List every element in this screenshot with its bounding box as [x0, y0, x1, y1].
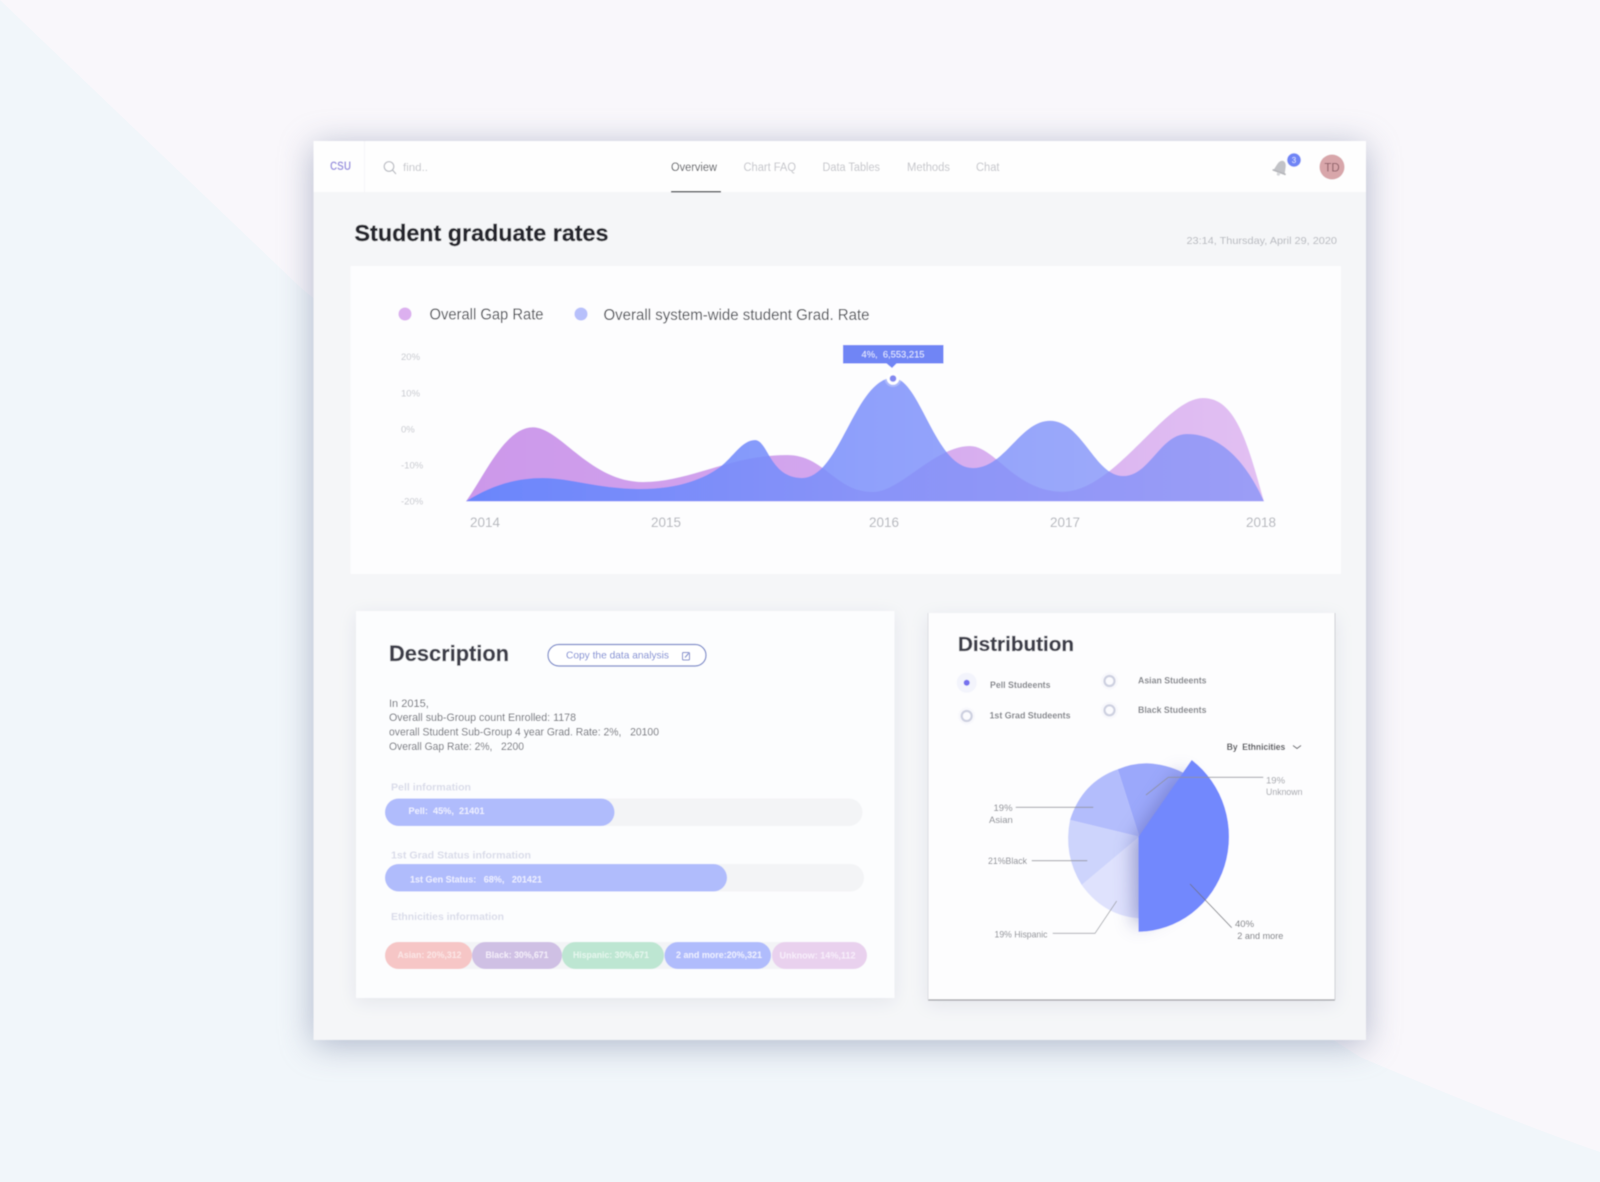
bar: Pell	[385, 798, 862, 826]
tab: Overview: Overview	[671, 162, 718, 174]
segment: Hispanic: Hispanic: 30%,671	[573, 950, 649, 960]
icon: search	[384, 162, 396, 174]
panel: distribution	[928, 613, 1335, 1000]
x axis labels: 2017	[1050, 514, 1080, 530]
dashboard window shadow	[313, 146, 1366, 1045]
slice: 2 and more	[1138, 760, 1229, 932]
y axis labels: 0%	[401, 424, 415, 436]
description text: In 2015,	[389, 698, 429, 710]
date stamp: 23:14, Thursday, April 29, 2020	[1186, 235, 1337, 247]
x axis labels	[470, 514, 1276, 530]
callout: 40% 2 and more: 2 and more	[1237, 931, 1283, 942]
radio: Black Studeents	[1101, 702, 1206, 719]
x axis labels: 2014	[470, 514, 500, 530]
heading: Distribution: Distribution	[958, 633, 1074, 656]
segment: 2 and more	[664, 942, 771, 969]
dashboard window	[314, 141, 1366, 1040]
callout: 21% Black: 21%Black	[988, 856, 1027, 867]
heading: Description: Description	[389, 641, 509, 666]
callout: 21% Black	[988, 856, 1087, 867]
highlighted data point	[884, 370, 902, 387]
x axis labels: 2015	[651, 514, 681, 530]
callout: 19% Unknown: Unknown	[1266, 787, 1302, 798]
callout: 19% Unknown: 19%	[1266, 776, 1286, 786]
slice: Hispanic	[1082, 837, 1139, 918]
legend: Overall system-wide student Grad. Rate: Overall system-wide student Grad. Rate	[604, 307, 870, 324]
tooltip	[843, 345, 944, 368]
avatar: TD	[1324, 162, 1340, 174]
tooltip: 4%, 6,553,215	[862, 350, 924, 360]
callout: 19% Asian	[989, 803, 1093, 826]
bar: ethnicities	[385, 942, 867, 969]
y axis labels	[401, 352, 424, 508]
radio options	[957, 672, 1206, 724]
segment: Black: Black: 30%,671	[486, 950, 548, 960]
x axis labels: 2016	[869, 514, 899, 530]
bar: 1st Gen Status	[385, 864, 864, 892]
y axis labels: 10%	[401, 388, 421, 400]
x axis labels: 2018	[1246, 514, 1276, 530]
segment: Asian	[385, 942, 472, 969]
radio: 1st Grad Studeents: 1st Grad Studeents	[990, 710, 1070, 722]
title: Student graduate rates	[354, 220, 608, 246]
segment: Unknow: Unknow: 14%,112	[780, 950, 856, 960]
area series: Overall system-wide student Grad. Rate	[466, 378, 1264, 501]
label: 1st Grad Status information: 1st Grad Status information	[391, 850, 531, 862]
radio: Pell Studeents	[957, 673, 1050, 693]
icon: notification bell	[1271, 153, 1301, 178]
button: copy the data analysis: Copy the data analysis	[566, 650, 669, 662]
radio: Pell Studeents: Pell Studeents	[990, 680, 1050, 691]
tab: Chart FAQ: Chart FAQ	[744, 162, 796, 174]
radio: Asian Studeents: Asian Studeents	[1138, 676, 1206, 686]
slice: Unknown	[1118, 760, 1192, 837]
radio: Black Studeents: Black Studeents	[1138, 705, 1206, 716]
pie chart	[1068, 760, 1229, 932]
description text: Overall Gap Rate: 2%, 2200	[389, 741, 524, 753]
label: Ethnicities information: Ethnicities information	[391, 912, 504, 923]
panel: area chart	[350, 266, 1341, 574]
y axis labels: -20%	[401, 496, 424, 508]
description text: Overall sub-Group count Enrolled: 1178	[389, 712, 576, 724]
avatar	[1320, 154, 1344, 180]
label: Pell information: Pell information	[391, 782, 471, 794]
button: copy the data analysis	[548, 644, 706, 666]
segment: Hispanic	[562, 942, 664, 969]
search placeholder: find..	[403, 162, 428, 174]
tab: Overview	[671, 162, 721, 192]
panel shadow: distribution	[928, 618, 1335, 1004]
segment: Black	[472, 942, 562, 969]
icon: notification bell: 3	[1292, 156, 1297, 165]
panel: description	[356, 611, 894, 998]
y axis labels: -10%	[401, 460, 424, 472]
panel shadow: description	[356, 615, 894, 1002]
tab: Data Tables: Data Tables	[822, 162, 880, 174]
description text: overall Student Sub-Group 4 year Grad. Rate: 2%, 20100	[389, 726, 659, 738]
callout: 19% Asian: Asian	[989, 815, 1013, 826]
top navigation bar	[314, 141, 1366, 192]
logo: CSU	[330, 159, 351, 173]
segment: 2 and more: 2 and more:20%,321	[676, 950, 762, 960]
description text	[389, 698, 659, 753]
callout: 19% Hispanic	[994, 901, 1117, 940]
bar: Pell: Pell: 45%, 21401	[408, 806, 484, 816]
slice: Black	[1068, 820, 1139, 885]
slice: Asian	[1070, 769, 1139, 837]
segment: Unknow	[772, 942, 867, 969]
radio: 1st Grad Studeents	[958, 708, 1070, 724]
callout: 19% Asian: 19%	[994, 803, 1013, 814]
callout: 40% 2 and more: 40%	[1235, 919, 1255, 930]
segment: Asian: Asian: 20%,312	[398, 950, 462, 960]
dropdown: By Ethnicities: By Ethnicities	[1227, 742, 1285, 752]
tab: Chat: Chat	[976, 162, 1000, 174]
callout: 40% 2 and more	[1190, 884, 1283, 942]
callout: 19% Hispanic: 19% Hispanic	[994, 930, 1048, 940]
legend: Overall Gap Rate: Overall Gap Rate	[430, 306, 544, 324]
callout: 19% Unknown	[1146, 776, 1302, 798]
slice shadow	[1132, 770, 1206, 926]
area series: Overall Gap Rate	[466, 398, 1264, 501]
bar: 1st Gen Status: 1st Gen Status: 68%, 201421	[410, 874, 542, 884]
radio: Asian Studeents	[1101, 672, 1206, 690]
y axis labels: 20%	[401, 352, 421, 363]
tab: Methods: Methods	[907, 162, 950, 174]
